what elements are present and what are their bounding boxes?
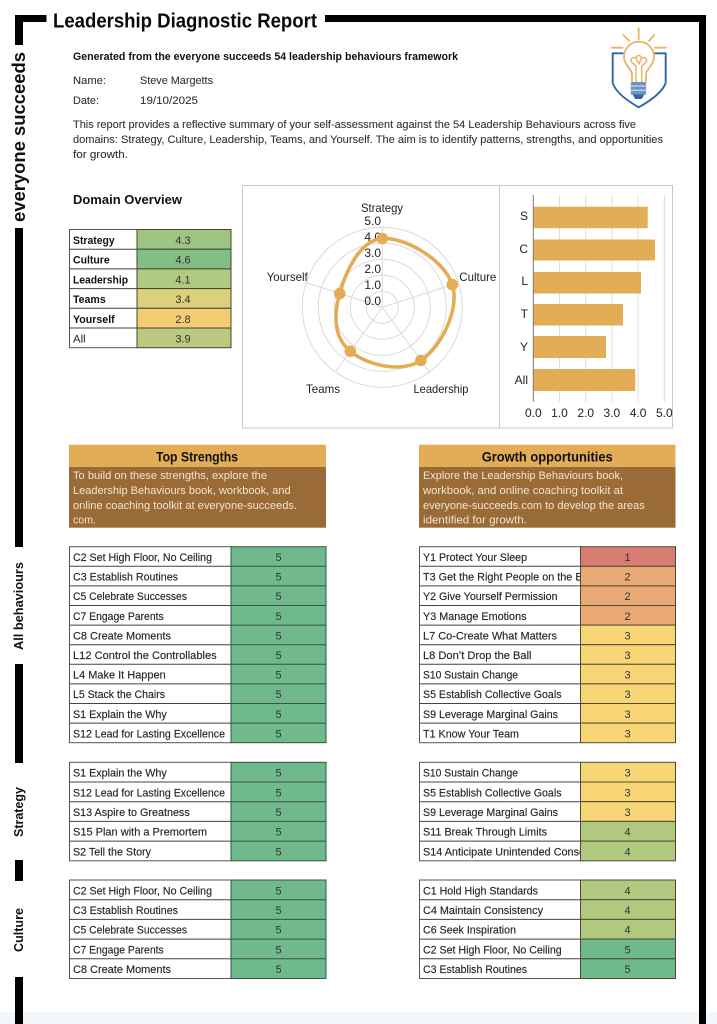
panel: Growth opportunities header: workbook, and online coaching toolkit at bbox=[422, 485, 623, 497]
bar chart: C bbox=[519, 242, 528, 256]
table: growth opportunities, all behaviours: 2 bbox=[624, 572, 631, 584]
table: top strengths, all behaviours: 5 bbox=[275, 670, 282, 682]
title: Leadership Diagnostic Report bbox=[53, 10, 317, 32]
table: growth opportunities, culture: C2 Set High Floor, No Ceiling bbox=[423, 944, 562, 956]
panel: Top Strengths header: com. bbox=[73, 514, 96, 526]
table: top strengths, strategy: S2 Tell the Story bbox=[73, 846, 151, 858]
domain score table: 2.8 bbox=[175, 314, 191, 326]
report details: Name: bbox=[73, 75, 106, 87]
table: top strengths, all behaviours: L12 Control the Controllables bbox=[73, 650, 217, 662]
table: growth opportunities, all behaviours: Y1 Protect Your Sleep bbox=[423, 552, 527, 564]
table: growth opportunities, culture: 4 bbox=[624, 905, 631, 917]
table: growth opportunities, culture: 4 bbox=[624, 885, 631, 897]
radar chart: 1.0 bbox=[364, 278, 381, 292]
report details: 19/10/2025 bbox=[140, 95, 198, 107]
side label: Strategy: Strategy bbox=[11, 786, 26, 837]
table: growth opportunities, all behaviours: 2 bbox=[624, 611, 631, 623]
table: growth opportunities, all behaviours: 3 bbox=[624, 709, 631, 721]
domain score table: Leadership bbox=[73, 274, 128, 286]
table: growth opportunities, strategy: S11 Break Through Limits bbox=[423, 827, 547, 839]
table: growth opportunities, strategy: S5 Establish Collective Goals bbox=[423, 787, 562, 799]
table: top strengths, all behaviours: 5 bbox=[275, 552, 282, 564]
domain score table bbox=[70, 230, 231, 348]
table: growth opportunities, strategy: S9 Leverage Marginal Gains bbox=[423, 807, 558, 819]
radar chart: 2.0 bbox=[364, 262, 381, 276]
table: top strengths, strategy: 5 bbox=[275, 846, 282, 858]
table: top strengths, strategy: 5 bbox=[275, 827, 282, 839]
bar chart: L bbox=[521, 274, 528, 288]
table: top strengths, all behaviours: 5 bbox=[275, 650, 282, 662]
table: growth opportunities, all behaviours: 3 bbox=[624, 689, 631, 701]
table: growth opportunities, strategy: 3 bbox=[624, 787, 631, 799]
table: growth opportunities, strategy: 3 bbox=[624, 807, 631, 819]
panel: Top Strengths header bbox=[69, 445, 326, 528]
panel: Growth opportunities header: Growth opportunities bbox=[482, 449, 613, 465]
panel: Growth opportunities header: identified for growth. bbox=[423, 514, 527, 526]
table: top strengths, all behaviours: S12 Lead for Lasting Excellence bbox=[73, 728, 225, 740]
table: growth opportunities, all behaviours: 1 bbox=[624, 552, 631, 564]
table: growth opportunities, culture: 5 bbox=[624, 964, 631, 976]
intro paragraph: domains: Strategy, Culture, Leadership, Teams, and Yourself. The aim is to identify patterns, strengths, and opportunities bbox=[73, 134, 664, 146]
table: top strengths, all behaviours: L5 Stack the Chairs bbox=[73, 689, 165, 701]
table: top strengths, all behaviours: 5 bbox=[275, 709, 282, 721]
bar chart: 3.0 bbox=[604, 406, 621, 420]
table: top strengths, culture: 5 bbox=[275, 885, 282, 897]
table: top strengths, culture: C5 Celebrate Successes bbox=[73, 925, 187, 937]
table: growth opportunities, strategy: 4 bbox=[624, 827, 631, 839]
table: growth opportunities, culture: C3 Establish Routines bbox=[423, 964, 527, 976]
domain score table: 4.6 bbox=[175, 255, 191, 267]
table: top strengths, all behaviours: 5 bbox=[275, 591, 282, 603]
domain score table: All bbox=[73, 334, 86, 346]
panel: Growth opportunities header bbox=[419, 445, 676, 528]
table: top strengths, culture: C3 Establish Routines bbox=[73, 905, 178, 917]
radar chart: 3.0 bbox=[364, 246, 381, 260]
domain score table: Yourself bbox=[73, 314, 115, 326]
table: top strengths, all behaviours: C3 Establish Routines bbox=[73, 572, 178, 584]
table: growth opportunities, all behaviours: 3 bbox=[624, 670, 631, 682]
radar chart: Strategy bbox=[361, 201, 403, 215]
table: growth opportunities, all behaviours: 3 bbox=[624, 728, 631, 740]
table: growth opportunities, all behaviours bbox=[420, 547, 676, 743]
table: growth opportunities, all behaviours: T1 Know Your Team bbox=[423, 728, 519, 740]
table: top strengths, all behaviours: 5 bbox=[275, 572, 282, 584]
table: growth opportunities, all behaviours: Y2 Give Yourself Permission bbox=[423, 591, 558, 603]
table: top strengths, culture bbox=[70, 880, 326, 978]
table: top strengths, strategy bbox=[70, 762, 326, 861]
panel: Top Strengths header: To build on these strengths, explore the bbox=[73, 470, 267, 482]
table: top strengths, all behaviours: 5 bbox=[275, 689, 282, 701]
table: top strengths, strategy: S13 Aspire to Greatness bbox=[73, 807, 190, 819]
table: top strengths, all behaviours: L4 Make It Happen bbox=[73, 670, 166, 682]
domain score table: Teams bbox=[73, 294, 106, 306]
table: top strengths, all behaviours bbox=[70, 547, 326, 743]
intro paragraph bbox=[73, 119, 664, 161]
table: top strengths, culture: 5 bbox=[275, 944, 282, 956]
table: growth opportunities, all behaviours: Y3 Manage Emotions bbox=[423, 611, 527, 623]
table: top strengths, strategy: S15 Plan with a Premortem bbox=[73, 827, 207, 839]
table: top strengths, strategy: S12 Lead for Lasting Excellence bbox=[73, 787, 225, 799]
table: growth opportunities, all behaviours: L8 Don’t Drop the Ball bbox=[423, 650, 532, 662]
side label: Culture: Culture bbox=[11, 908, 26, 952]
table: growth opportunities, culture: 4 bbox=[624, 925, 631, 937]
subtitle: Generated from the everyone succeeds 54 leadership behaviours framework bbox=[73, 51, 459, 63]
table: top strengths, culture: C8 Create Moments bbox=[73, 964, 171, 976]
domain score table: 4.1 bbox=[175, 274, 191, 286]
table: growth opportunities, all behaviours: T3 Get the Right People on the Bus bbox=[423, 572, 594, 584]
table: top strengths, all behaviours: C8 Create Moments bbox=[73, 630, 171, 642]
panel: Growth opportunities header: everyone-succeeds.com to develop the areas bbox=[423, 500, 645, 512]
table: growth opportunities, all behaviours: S10 Sustain Change bbox=[423, 670, 518, 682]
table: growth opportunities, all behaviours: 2 bbox=[624, 591, 631, 603]
table: growth opportunities, culture: C4 Maintain Consistency bbox=[423, 905, 543, 917]
table: top strengths, strategy: 5 bbox=[275, 768, 282, 780]
table: top strengths, strategy: 5 bbox=[275, 807, 282, 819]
side label: everyone succeeds: everyone succeeds bbox=[9, 52, 29, 222]
intro paragraph: This report provides a reflective summary of your self-assessment against the 54 Leadership Behaviours across five bbox=[73, 119, 636, 131]
report details: Date: bbox=[73, 95, 99, 107]
radar chart: Culture bbox=[459, 270, 497, 284]
table: top strengths, culture: C7 Engage Parents bbox=[73, 944, 164, 956]
table: top strengths, culture: 5 bbox=[275, 964, 282, 976]
table: growth opportunities, all behaviours: S9 Leverage Marginal Gains bbox=[423, 709, 558, 721]
table: growth opportunities, strategy: S14 Anticipate Unintended Consequences bbox=[423, 846, 626, 858]
table: growth opportunities, all behaviours: S5 Establish Collective Goals bbox=[423, 689, 562, 701]
intro paragraph: for growth. bbox=[73, 149, 128, 161]
side label: All behaviours: All behaviours bbox=[11, 562, 26, 650]
table: growth opportunities, culture bbox=[420, 880, 676, 978]
panel: Top Strengths header: online coaching toolkit at everyone-succeeds. bbox=[73, 500, 297, 512]
table: growth opportunities, strategy: 3 bbox=[624, 768, 631, 780]
radar chart: Teams bbox=[306, 382, 340, 396]
heading: Domain Overview: Domain Overview bbox=[73, 192, 183, 207]
table: top strengths, all behaviours: 5 bbox=[275, 728, 282, 740]
table: growth opportunities, all behaviours: L7 Co-Create What Matters bbox=[423, 630, 557, 642]
table: top strengths, culture: 5 bbox=[275, 925, 282, 937]
bar chart: Y bbox=[520, 340, 528, 354]
bar chart: T bbox=[521, 307, 529, 321]
table: top strengths, all behaviours: S1 Explain the Why bbox=[73, 709, 167, 721]
bar chart: 5.0 bbox=[656, 406, 673, 420]
panel: Top Strengths header: Leadership Behaviours book, workbook, and bbox=[73, 485, 291, 497]
domain score table: 4.3 bbox=[175, 235, 191, 247]
panel: Top Strengths header: Top Strengths bbox=[156, 449, 238, 465]
table: growth opportunities, all behaviours: 3 bbox=[624, 650, 631, 662]
radar chart: Leadership bbox=[414, 382, 469, 396]
radar chart: Yourself bbox=[267, 270, 308, 284]
table: growth opportunities, culture: 5 bbox=[624, 944, 631, 956]
table: top strengths, all behaviours: C2 Set High Floor, No Ceiling bbox=[73, 552, 212, 564]
domain score table: Strategy bbox=[73, 235, 116, 247]
radar chart: 4.0 bbox=[364, 230, 381, 244]
table: top strengths, strategy: S1 Explain the Why bbox=[73, 768, 167, 780]
table: growth opportunities, strategy: S10 Sustain Change bbox=[423, 768, 518, 780]
table: top strengths, strategy: 5 bbox=[275, 787, 282, 799]
chart panel frame bbox=[242, 186, 672, 428]
table: top strengths, all behaviours: C5 Celebrate Successes bbox=[73, 591, 187, 603]
bar chart: All bbox=[515, 373, 528, 387]
panel: Growth opportunities header: Explore the Leadership Behaviours book, bbox=[423, 470, 623, 482]
domain score table: 3.4 bbox=[175, 294, 191, 306]
table: top strengths, culture: 5 bbox=[275, 905, 282, 917]
bar chart: 0.0 bbox=[525, 406, 542, 420]
table: growth opportunities, strategy bbox=[420, 762, 676, 861]
radar chart: 0.0 bbox=[364, 294, 381, 308]
table: top strengths, all behaviours: 5 bbox=[275, 611, 282, 623]
report details: Steve Margetts bbox=[140, 75, 213, 87]
table: growth opportunities, culture: C6 Seek Inspiration bbox=[423, 925, 516, 937]
icon: lightbulb shield logo bbox=[612, 28, 666, 107]
table: growth opportunities, strategy: 4 bbox=[624, 846, 631, 858]
radar chart bbox=[267, 201, 497, 396]
table: growth opportunities, all behaviours: 3 bbox=[624, 630, 631, 642]
bar chart bbox=[515, 195, 673, 420]
domain score table: 3.9 bbox=[175, 334, 191, 346]
report details bbox=[73, 75, 213, 107]
domain score table: Culture bbox=[73, 255, 110, 267]
table: top strengths, all behaviours: 5 bbox=[275, 630, 282, 642]
table: growth opportunities, culture: C1 Hold High Standards bbox=[423, 885, 538, 897]
bar chart: 4.0 bbox=[630, 406, 647, 420]
table: top strengths, culture: C2 Set High Floor, No Ceiling bbox=[73, 885, 212, 897]
bar chart: 2.0 bbox=[577, 406, 594, 420]
bar chart: S bbox=[520, 209, 528, 223]
radar chart: 5.0 bbox=[364, 214, 381, 228]
bar chart: 1.0 bbox=[551, 406, 568, 420]
table: top strengths, all behaviours: C7 Engage Parents bbox=[73, 611, 164, 623]
